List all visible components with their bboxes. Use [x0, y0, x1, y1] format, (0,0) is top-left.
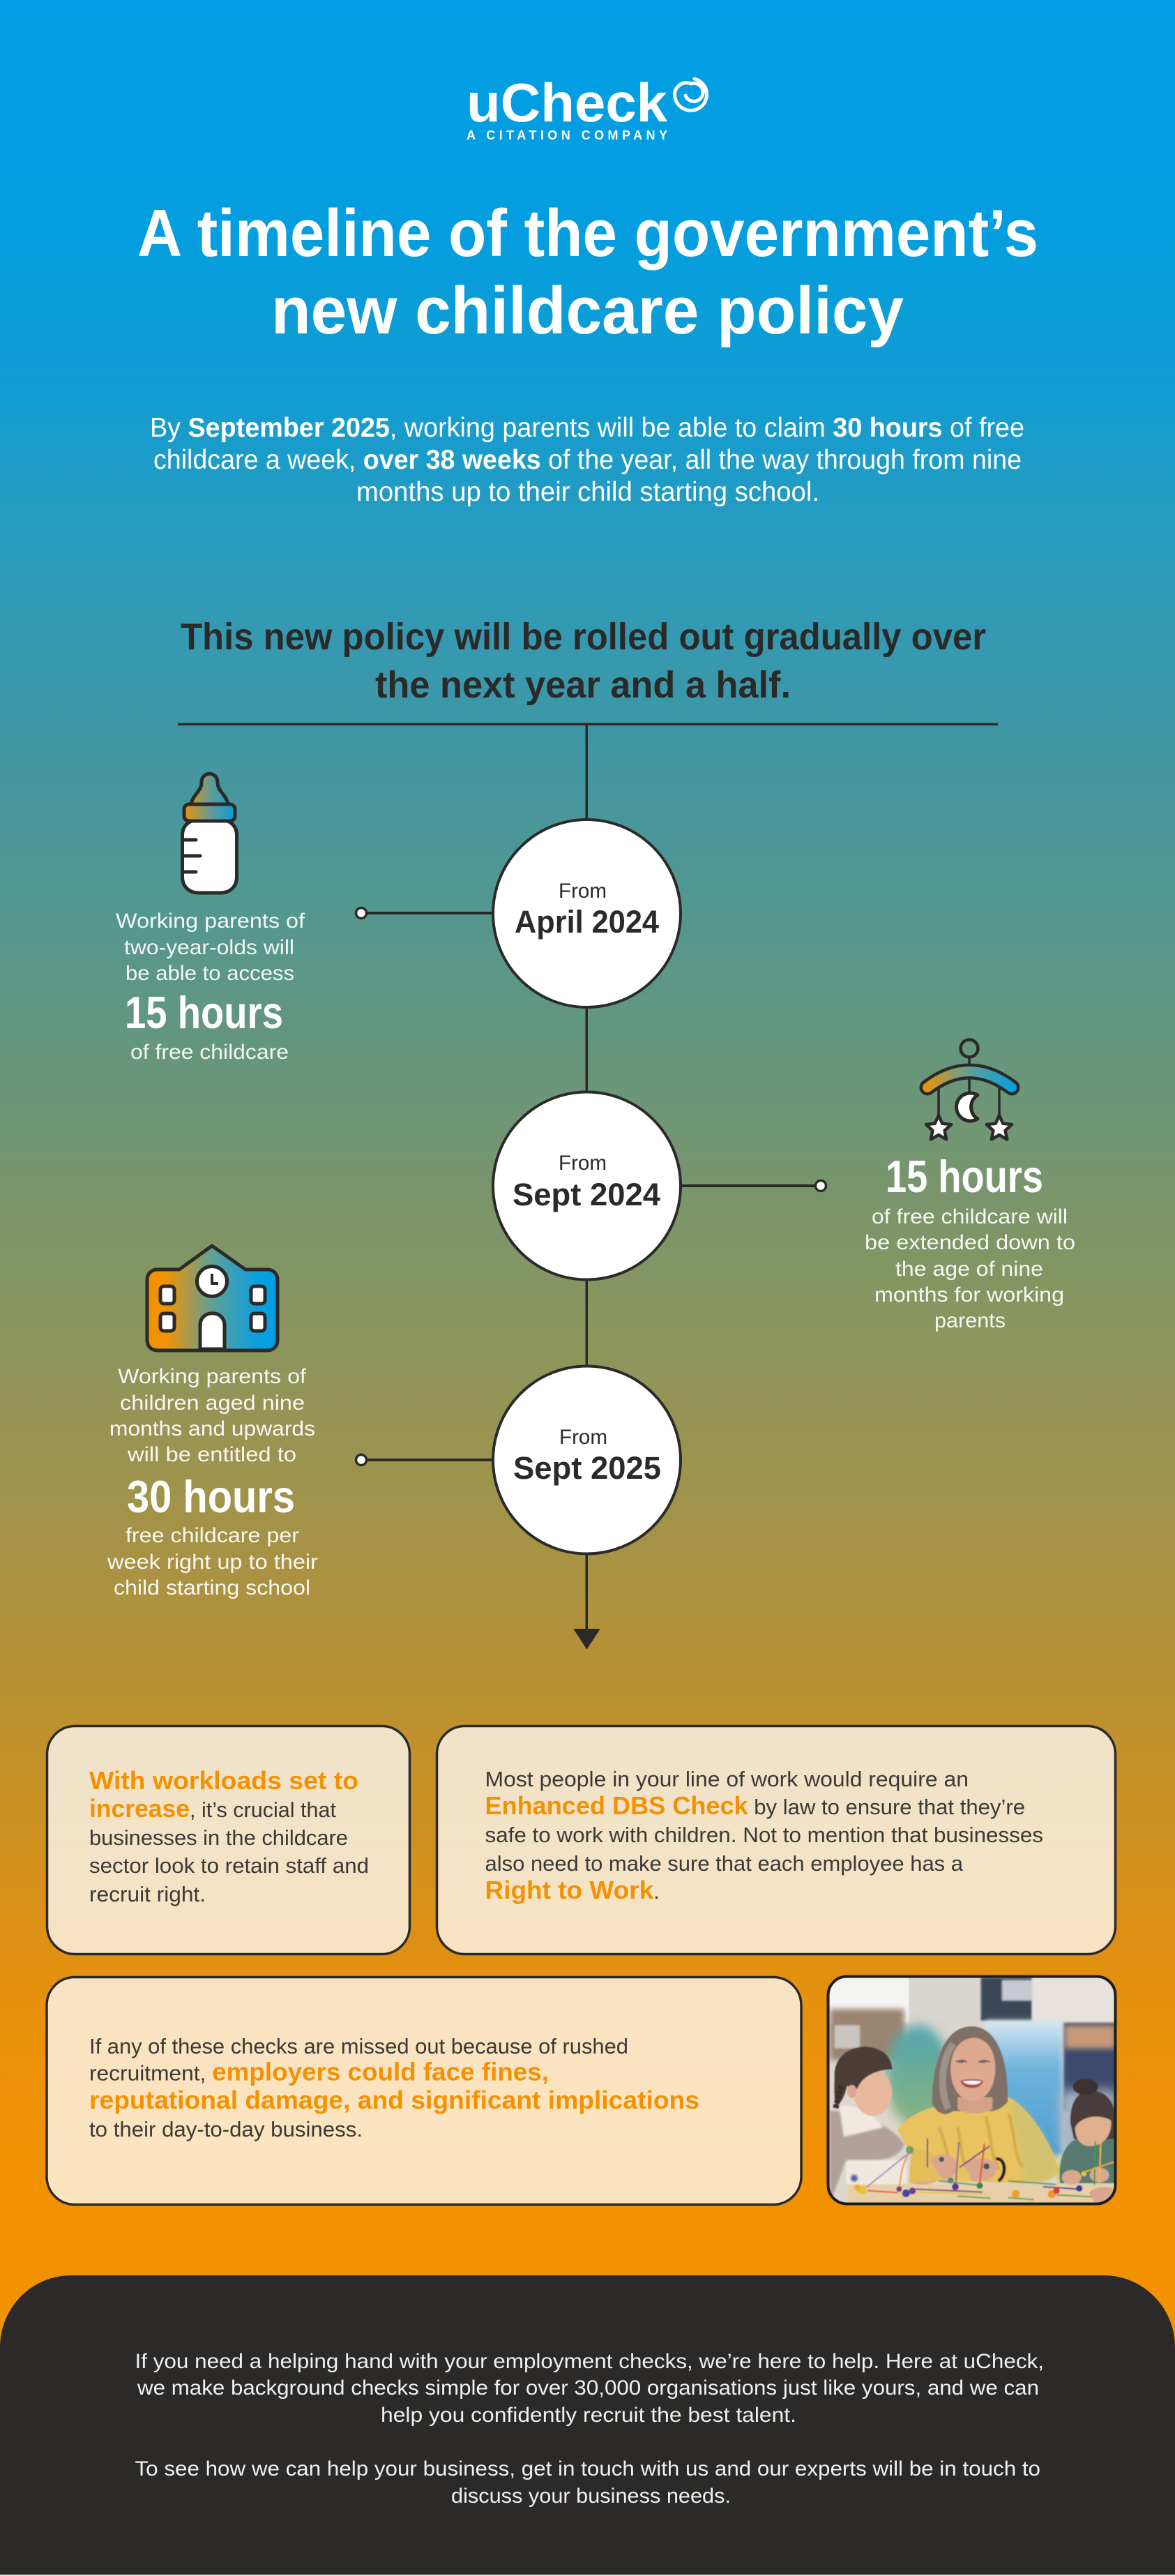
connector	[356, 908, 494, 918]
date label	[515, 880, 659, 940]
footer panel	[0, 2275, 1175, 2575]
panel text: sector look to retain staff and	[89, 1853, 369, 1878]
stat: 15 hours: 15 hours	[886, 1151, 1043, 1202]
panel text: Right to Work.	[485, 1876, 660, 1904]
panel: workloads	[47, 1726, 410, 1954]
text block: Sept 2024: of free childcare will	[872, 1205, 1068, 1228]
logo wordmark: uCheck	[467, 72, 668, 133]
text block: Sept 2024: be extended down to	[865, 1231, 1075, 1254]
sticks and beads	[867, 2139, 1114, 2199]
panel text: businesses in the childcare	[89, 1825, 348, 1850]
intro paragraph: months up to their child starting school.	[356, 477, 819, 507]
icon: baby bottle	[183, 774, 237, 893]
panel text: safe to work with children. Not to mention that businesses	[485, 1823, 1043, 1847]
footer text: call to action: discuss your business needs.	[451, 2485, 731, 2508]
date label: April 2024	[515, 904, 659, 940]
text block: April 2024: two-year-olds will	[124, 936, 294, 959]
stat: 15 hours: 15 hours	[125, 987, 283, 1038]
date circle	[493, 1366, 681, 1554]
panel text: Enhanced DBS Check by law to ensure that they’re	[485, 1791, 1025, 1820]
date circle	[493, 820, 681, 1007]
title: new childcare policy	[271, 273, 904, 348]
logo: uCheck	[467, 72, 707, 142]
footer text: offer	[135, 2350, 1044, 2427]
milestone: April 2024	[356, 820, 681, 1007]
panel text: Most people in your line of work would require an	[485, 1767, 969, 1791]
date label: From	[559, 1426, 607, 1449]
footer text: offer: If you need a helping hand with your employment checks, we’re here to help. Here at uCheck,	[135, 2350, 1044, 2373]
footer text: call to action: To see how we can help your business, get in touch with us and our experts will be in touch to	[135, 2457, 1040, 2480]
date label: Sept 2024	[513, 1177, 660, 1212]
left child	[830, 2047, 939, 2204]
woman	[897, 2026, 1059, 2184]
title	[137, 196, 1038, 348]
logo tagline: A CITATION COMPANY	[467, 128, 667, 142]
text block: Sept 2025: week right up to their	[107, 1551, 318, 1574]
milestone: Sept 2025	[356, 1366, 681, 1554]
text block: Sept 2025: Working parents of	[118, 1365, 307, 1388]
panel text	[89, 1766, 369, 1906]
text block: Sept 2025: months and upwards	[109, 1417, 315, 1440]
table	[847, 2184, 1114, 2203]
intro paragraph: childcare a week, over 38 weeks of the year, all the way through from nine	[153, 445, 1022, 475]
subheading	[181, 616, 986, 706]
date label	[513, 1152, 660, 1212]
text block: Sept 2025: children aged nine	[120, 1392, 305, 1415]
text block: April 2024	[116, 910, 305, 1064]
date circle	[493, 1092, 681, 1279]
arrow head	[575, 1629, 599, 1648]
panel text: reputational damage, and significant implications	[89, 2086, 699, 2114]
date label: From	[559, 1152, 607, 1175]
text block: Sept 2024	[865, 1151, 1075, 1332]
icon: school building	[147, 1246, 278, 1350]
panel text: With workloads set to	[89, 1766, 358, 1795]
timeline axis and arrow	[178, 723, 998, 1648]
intro paragraph	[150, 413, 1024, 507]
footer text: offer: help you confidently recruit the best talent.	[381, 2404, 796, 2427]
footer text: offer: we make background checks simple for over 30,000 organisations just like yours, and we can	[137, 2377, 1039, 2400]
text block: Sept 2025: will be entitled to	[127, 1443, 296, 1466]
intro paragraph: By September 2025, working parents will be able to claim 30 hours of free	[150, 413, 1024, 443]
text block: April 2024: Working parents of	[116, 910, 305, 933]
connector	[679, 1180, 826, 1191]
date label	[513, 1426, 661, 1486]
panel text: recruitment, employers could face fines,	[89, 2058, 549, 2086]
connector	[356, 1455, 494, 1465]
icon: baby mobile	[926, 1039, 1012, 1139]
text block: Sept 2025	[107, 1365, 318, 1599]
text block: Sept 2024: parents	[934, 1309, 1006, 1332]
panel text: recruit right.	[89, 1882, 206, 1906]
right child	[1059, 2079, 1116, 2185]
date label: Sept 2025	[513, 1450, 661, 1486]
text block: Sept 2024: months for working	[874, 1283, 1064, 1306]
photo frame	[828, 1977, 1116, 2204]
text block: Sept 2025: free childcare per	[126, 1524, 299, 1547]
panel text: also need to make sure that each employee has a	[485, 1851, 964, 1876]
logo swirl icon	[674, 79, 707, 110]
panel text	[89, 2034, 699, 2141]
text block: Sept 2024: the age of nine	[895, 1258, 1043, 1281]
text block: April 2024: be able to access	[126, 962, 294, 985]
stat: 30 hours: 30 hours	[127, 1471, 295, 1522]
text block: Sept 2025: child starting school	[114, 1576, 310, 1599]
title: A timeline of the government’s	[137, 196, 1038, 271]
subheading: the next year and a half.	[375, 664, 791, 706]
subheading: This new policy will be rolled out gradually over	[181, 616, 986, 658]
date label: From	[559, 880, 607, 903]
panel: DBS check	[437, 1726, 1116, 1954]
panel text: If any of these checks are missed out because of rushed	[89, 2034, 628, 2058]
panel text: increase, it’s crucial that	[89, 1794, 336, 1823]
panel text	[485, 1767, 1043, 1904]
panel text: to their day-to-day business.	[89, 2117, 363, 2141]
footer text: call to action	[135, 2457, 1040, 2508]
text block: April 2024: of free childcare	[130, 1041, 289, 1064]
panel: consequences	[47, 1977, 801, 2204]
milestone: Sept 2024	[493, 1092, 826, 1279]
photo: carer with children at table	[825, 1974, 1118, 2206]
